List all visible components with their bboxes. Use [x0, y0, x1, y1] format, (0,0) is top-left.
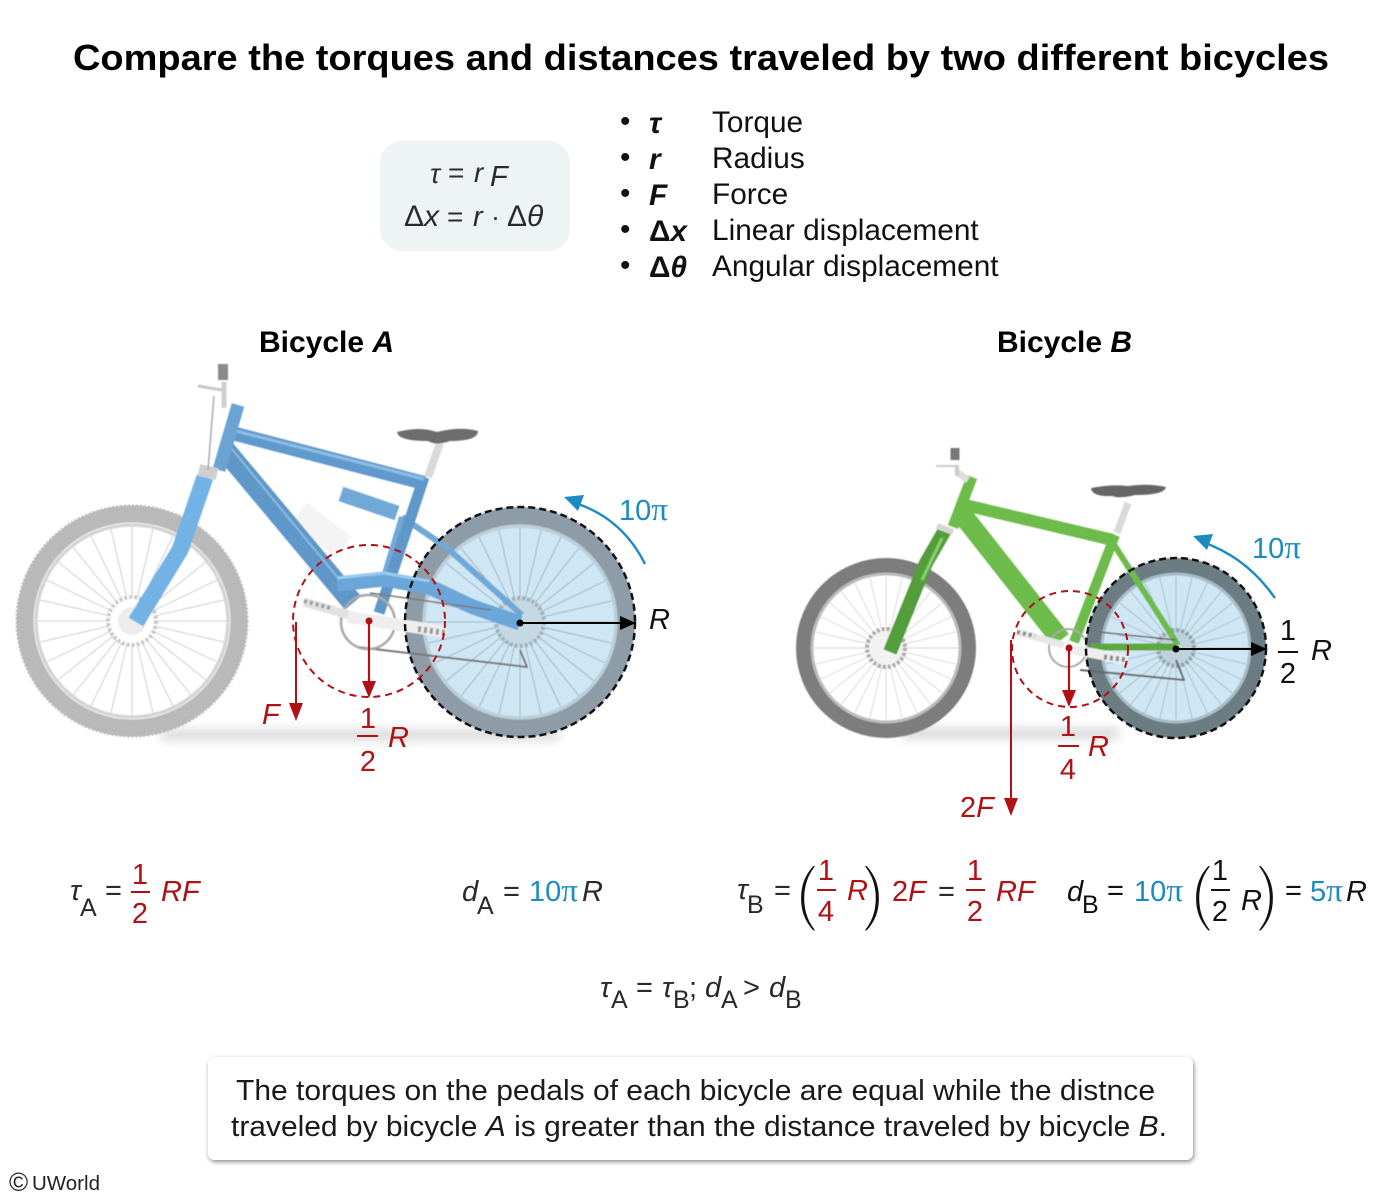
credit: UWorld copyright: ©	[9, 1167, 28, 1197]
front wheel A	[16, 506, 248, 736]
equation: torque A: 1	[132, 859, 148, 891]
equation: torque B: )	[861, 853, 885, 933]
heading: Bicycle B: Bicycle B	[997, 326, 1132, 359]
panel: core formulas: =	[447, 201, 463, 232]
equation: comparison: B	[673, 986, 690, 1014]
arrow: force 2F	[1004, 640, 1018, 816]
equation: distance B: (	[1190, 853, 1214, 933]
equation: distance B: 5π	[1310, 873, 1343, 909]
label: R: R	[649, 604, 670, 636]
equation: distance A: A	[477, 892, 494, 920]
legend: variable definitions: Linear displacement	[712, 214, 979, 247]
equation: distance A: =	[503, 876, 520, 908]
equation: torque A: A	[80, 894, 97, 922]
arrow: wheel radius B	[1172, 642, 1267, 656]
arrow: pedal radius A	[362, 618, 376, 698]
equation: comparison: τ	[600, 972, 613, 1004]
saddle A	[397, 429, 478, 444]
frame B	[890, 448, 1184, 680]
panel: core formulas: ·	[491, 202, 500, 232]
equation: distance B: )	[1255, 853, 1279, 933]
equation: torque B: RF	[996, 876, 1037, 908]
legend: variable definitions: Angular displacement	[712, 250, 999, 283]
legend: variable definitions: •	[620, 213, 630, 246]
equation: torque B: 1	[967, 855, 983, 887]
callout: conclusion: traveled by bicycle A is greater than the distance traveled by bicycle B.	[231, 1111, 1167, 1143]
equation: torque A: 2	[132, 898, 148, 930]
legend: variable definitions: •	[620, 177, 630, 210]
label: fraction 1/2 R: 2	[360, 746, 376, 778]
drivetrain B	[1017, 629, 1128, 667]
equation: comparison: ;	[689, 972, 697, 1004]
legend: variable definitions: •	[620, 105, 630, 138]
label: fraction 1/2 R: R	[388, 722, 409, 754]
arrow: rotation A	[564, 495, 645, 564]
front wheel B	[804, 566, 968, 730]
drivetrain A	[304, 595, 446, 649]
legend: variable definitions: r	[649, 143, 662, 176]
equation: torque B: R	[847, 875, 868, 907]
equation: distance B: R	[1346, 876, 1367, 908]
label: fraction 1/4 R: 1	[1060, 711, 1076, 743]
label: fraction 1/2 R black: 2	[1280, 658, 1296, 690]
equation: comparison: d	[705, 972, 722, 1004]
saddle B	[1091, 485, 1166, 497]
equation: comparison: τ	[662, 972, 675, 1004]
equation: comparison: =	[636, 972, 653, 1004]
annotation: pedal circle A	[293, 545, 445, 697]
equation: torque A: =	[105, 875, 122, 907]
illustration: bicycle A	[16, 364, 626, 741]
equation: torque B: B	[747, 891, 764, 919]
equation: comparison: A	[611, 986, 628, 1014]
legend: variable definitions: •	[620, 141, 630, 174]
equation: comparison: d	[769, 972, 786, 1004]
equation: torque B: =	[774, 875, 791, 907]
equation: torque A: τ	[70, 875, 83, 907]
legend: variable definitions: Δx	[649, 215, 688, 248]
equation: comparison	[600, 972, 802, 1014]
panel: core formulas: r	[474, 157, 485, 188]
equation: torque B: τ	[737, 874, 750, 906]
equation: comparison: A	[721, 986, 738, 1014]
label: 2F: 2F	[960, 792, 996, 824]
legend: variable definitions: τ	[649, 107, 663, 140]
heading: Bicycle A: Bicycle A	[259, 326, 394, 359]
label: fraction 1/2 R: 1	[360, 703, 376, 735]
rear wheel A	[414, 516, 626, 728]
ground shadow A	[160, 729, 560, 741]
legend: variable definitions: •	[620, 249, 630, 282]
equation: torque B: =	[938, 876, 955, 908]
legend: variable definitions	[620, 105, 999, 284]
frame A	[136, 364, 527, 667]
annotation: pedal circle B	[1012, 591, 1128, 707]
equation: torque A	[70, 859, 202, 930]
label: fraction 1/2 R black	[1278, 615, 1332, 690]
credit: UWorld copyright	[9, 1167, 100, 1197]
panel: core formulas: =	[448, 157, 464, 188]
illustration: bicycle B	[804, 448, 1258, 739]
equation: torque B: 2F	[892, 876, 928, 908]
label: fraction 1/2 R black: 1	[1280, 615, 1296, 647]
legend: variable definitions: Force	[712, 178, 788, 211]
arrow: pedal radius B	[1062, 644, 1076, 707]
equation: torque B: (	[795, 853, 819, 933]
equation: distance A: R	[582, 876, 603, 908]
equation: distance A: d	[462, 876, 479, 908]
label: fraction 1/2 R black: R	[1311, 635, 1332, 667]
label: 10π B: 10π	[1252, 530, 1301, 566]
legend: variable definitions: Torque	[712, 106, 803, 139]
credit: UWorld copyright: UWorld	[32, 1172, 100, 1195]
arrow: force F	[289, 622, 303, 721]
panel: core formulas: F	[490, 161, 510, 193]
panel: core formulas: τ	[430, 159, 442, 189]
label: fraction 1/4 R: 4	[1060, 754, 1076, 786]
label: fraction 1/4 R: R	[1088, 731, 1109, 763]
label: fraction 1/4 R	[1058, 711, 1109, 786]
annotation: rear wheel outline B	[1086, 558, 1266, 738]
equation: distance B: =	[1107, 875, 1124, 907]
equation: comparison: >	[743, 972, 760, 1004]
equation: distance B	[1067, 853, 1367, 933]
equation: torque B	[737, 853, 1037, 933]
label: 10π A: 10π	[619, 492, 668, 528]
equation: comparison: B	[785, 986, 802, 1014]
panel: core formulas: Δx	[404, 200, 440, 233]
panel: core formulas	[380, 141, 570, 251]
callout: conclusion	[208, 1057, 1193, 1160]
equation: distance B: d	[1067, 876, 1084, 908]
equation: distance A	[462, 873, 603, 920]
equation: distance B: 10π	[1134, 873, 1183, 909]
label: fraction 1/2 R	[357, 703, 409, 778]
rear wheel B	[1094, 566, 1258, 730]
legend: variable definitions: Radius	[712, 142, 805, 175]
callout: conclusion: The torques on the pedals of each bicycle are equal while the distnce	[236, 1075, 1155, 1107]
equation: torque A: RF	[161, 876, 202, 908]
equation: torque B: 2	[967, 896, 983, 928]
legend: variable definitions: Δθ	[649, 251, 687, 284]
arrow: wheel radius A	[516, 616, 636, 630]
label: F: F	[262, 699, 282, 731]
equation: distance A: 10π	[529, 873, 578, 909]
equation: distance B: 2	[1212, 896, 1228, 928]
equation: distance B: 1	[1212, 855, 1228, 887]
arrow: rotation B	[1193, 534, 1275, 598]
equation: distance B: =	[1285, 875, 1302, 907]
ground shadow B	[900, 728, 1120, 739]
annotation: rear wheel outline A	[405, 507, 635, 737]
equation: distance B: R	[1241, 885, 1262, 917]
title: Compare the torques and distances traveled by two different bicycles	[73, 37, 1329, 78]
panel: core formulas: Δθ	[507, 200, 544, 233]
equation: torque B: 1	[818, 855, 834, 887]
equation: torque B: 4	[818, 896, 834, 928]
panel: core formulas: r	[473, 201, 484, 233]
legend: variable definitions: F	[649, 179, 668, 212]
equation: distance B: B	[1082, 891, 1099, 919]
